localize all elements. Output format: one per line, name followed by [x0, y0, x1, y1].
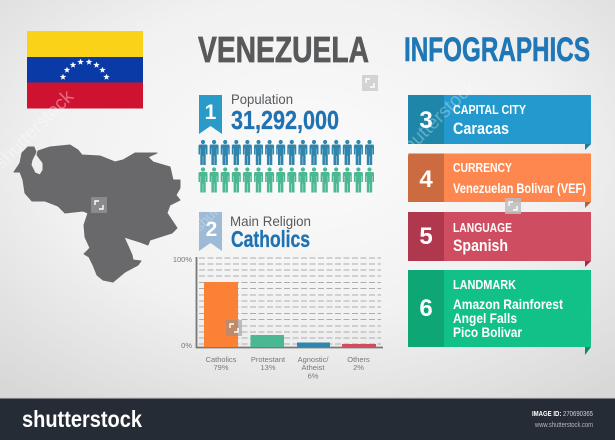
- label: Agnostic/Atheist: 6%: [308, 372, 319, 380]
- badge 1: [199, 95, 222, 134]
- panel 5: language: LANGUAGE: [453, 220, 512, 235]
- bar: Catholics: [204, 282, 238, 347]
- label: Catholics: 79%: [213, 363, 229, 372]
- panel 6: landmark: [408, 270, 591, 355]
- pictogram row: blue people: [198, 140, 374, 165]
- badge 2: 2: [206, 218, 217, 241]
- label: Others: Others: [347, 355, 370, 364]
- section 2: main religion: [199, 212, 311, 252]
- population value: 31,292,000: [231, 105, 339, 135]
- bar: Agnostic/Atheist: [297, 342, 330, 347]
- panel 6: landmark: Amazon Rainforest: [453, 296, 563, 312]
- panel 3: capital city: 3: [419, 107, 433, 134]
- panel 5: language: Spanish: [453, 236, 508, 255]
- religion label: Main Religion: [230, 213, 311, 229]
- panel 5: language: 5: [419, 223, 433, 250]
- axis label 100%: 100%: [173, 255, 192, 264]
- flag of Venezuela: [27, 31, 143, 108]
- panel 4: currency: [408, 154, 591, 208]
- panel 3: capital city: [408, 95, 591, 150]
- pictogram row: green people: [198, 167, 374, 192]
- watermark text: shutterstock: [393, 76, 480, 164]
- image id: IMAGE ID: 270690365: [532, 411, 593, 418]
- bar: Protestant: [250, 335, 284, 347]
- bar: Others: [342, 344, 376, 347]
- panel 3: capital city: Caracas: [453, 119, 509, 138]
- footer url: www.shutterstock.com: [534, 422, 593, 429]
- label: Others: 2%: [353, 363, 364, 372]
- label: Catholics: Catholics: [206, 355, 237, 364]
- axis label 0%: 0%: [181, 341, 192, 350]
- panel 6: landmark: Angel Falls: [453, 310, 517, 326]
- section 1: population: [198, 91, 374, 192]
- panel 6: landmark: LANDMARK: [453, 277, 517, 292]
- panel 5: language: [408, 212, 591, 267]
- title: Venezuela: VENEZUELA: [198, 29, 369, 70]
- watermark squares: [91, 75, 521, 336]
- footer bar: [0, 397, 615, 440]
- panel 4: currency: CURRENCY: [453, 160, 512, 175]
- badge 1: 1: [205, 101, 217, 124]
- label: Agnostic/Atheist: Atheist: [302, 363, 325, 372]
- bar chart: religion share: [173, 255, 383, 380]
- label: Protestant: 13%: [260, 363, 276, 372]
- panel 6: landmark: 6: [419, 295, 433, 322]
- map of Venezuela: [14, 145, 180, 282]
- panel 4: currency: 4: [419, 166, 433, 193]
- panel 3: capital city: CAPITAL CITY: [453, 102, 526, 117]
- watermark text: shutter: [191, 192, 233, 234]
- axis: [196, 257, 383, 348]
- panel 6: landmark: Pico Bolivar: [453, 324, 522, 340]
- label: Protestant: Protestant: [251, 355, 286, 364]
- population label: Population: [231, 91, 293, 107]
- watermark text: [0, 76, 480, 234]
- religion value: Catholics: [231, 226, 310, 252]
- label: Agnostic/Atheist: Agnostic/: [298, 355, 329, 364]
- footer logo: shutterstock: [22, 406, 142, 432]
